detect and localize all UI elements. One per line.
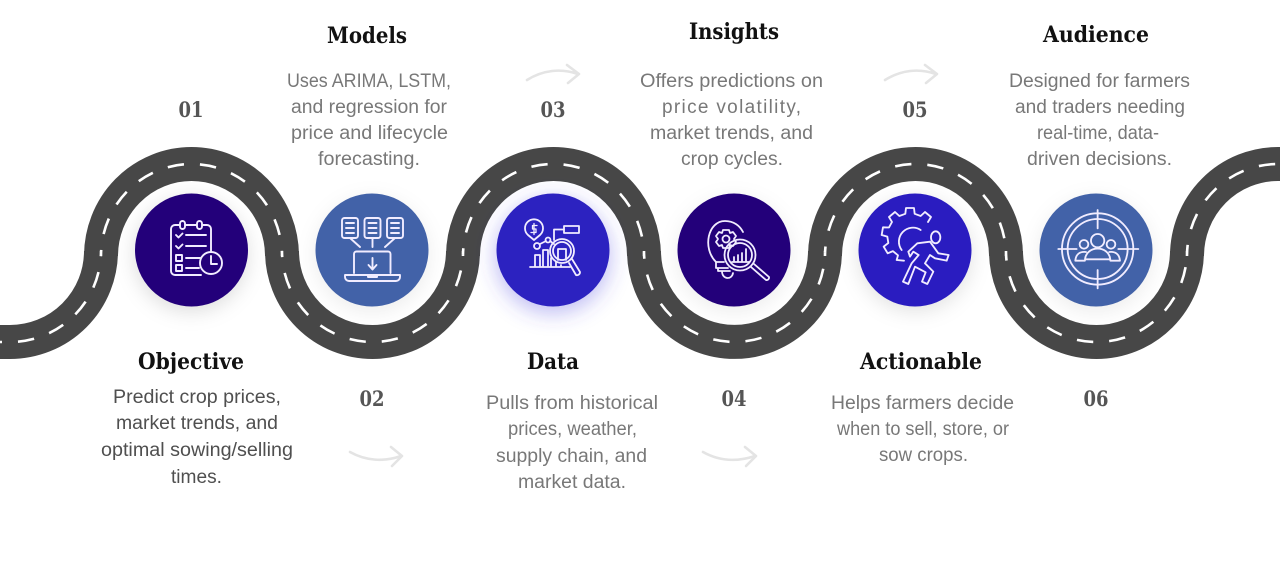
description: [640, 71, 823, 170]
step 02: Models: [287, 23, 451, 466]
step 01: Objective: [101, 97, 293, 488]
circle glows: [135, 198, 1152, 314]
icon: gear with running person: [858, 194, 972, 306]
step 04: Insights: [640, 19, 823, 466]
arrow: [885, 65, 937, 83]
description: market data.: [518, 472, 626, 493]
description: and traders needing: [1015, 97, 1185, 118]
icon: clipboard with clock: [135, 194, 248, 306]
number 03: 03: [540, 97, 566, 122]
description: crop cycles.: [681, 149, 783, 170]
description: Offers predictions on: [640, 71, 823, 92]
description: price and lifecycle: [291, 123, 448, 144]
description: real-time, data-: [1037, 123, 1159, 144]
title: Actionable: [859, 349, 982, 375]
description: Uses ARIMA, LSTM,: [287, 71, 451, 92]
arrow: [527, 65, 579, 83]
description: market trends, and: [650, 123, 813, 144]
title: Models: [327, 23, 407, 49]
step 06: Audience: [1009, 22, 1190, 411]
description: Predict crop prices,: [113, 387, 281, 408]
number 05: 05: [902, 97, 928, 122]
description: when to sell, store, or: [836, 419, 1010, 440]
description: and regression for: [291, 97, 448, 118]
number 04: 04: [722, 386, 746, 411]
number 06: 06: [1084, 386, 1108, 411]
title: Objective: [138, 349, 244, 375]
description: forecasting.: [318, 149, 420, 170]
description: price volatility,: [662, 97, 801, 118]
arrow: [350, 447, 402, 466]
icon: target with audience: [1040, 194, 1152, 306]
icon: light bulb with magnifier: [678, 194, 790, 306]
description: Helps farmers decide: [831, 393, 1014, 414]
winding road: [0, 164, 1280, 342]
description: prices, weather,: [508, 419, 637, 440]
description: [101, 387, 293, 488]
title: Audience: [1042, 22, 1149, 48]
description: [1009, 71, 1190, 170]
description: optimal sowing/selling: [101, 440, 293, 461]
description: [831, 393, 1014, 466]
title: Insights: [689, 19, 779, 45]
step 03: Data: [486, 65, 658, 493]
description: times.: [171, 467, 222, 488]
number 01: 01: [178, 97, 204, 122]
icon: chart under magnifier: [496, 194, 610, 306]
step 05: Actionable: [831, 65, 1014, 466]
description: [287, 71, 451, 170]
description: market trends, and: [116, 413, 278, 434]
icon: laptop with documents: [316, 194, 428, 306]
description: driven decisions.: [1027, 149, 1172, 170]
description: Designed for farmers: [1009, 71, 1190, 92]
description: sow crops.: [879, 445, 968, 466]
description: [486, 393, 658, 493]
description: Pulls from historical: [486, 393, 658, 414]
title: Data: [527, 349, 579, 375]
arrow: [703, 447, 756, 466]
number 02: 02: [360, 386, 384, 411]
description: supply chain, and: [496, 446, 647, 467]
